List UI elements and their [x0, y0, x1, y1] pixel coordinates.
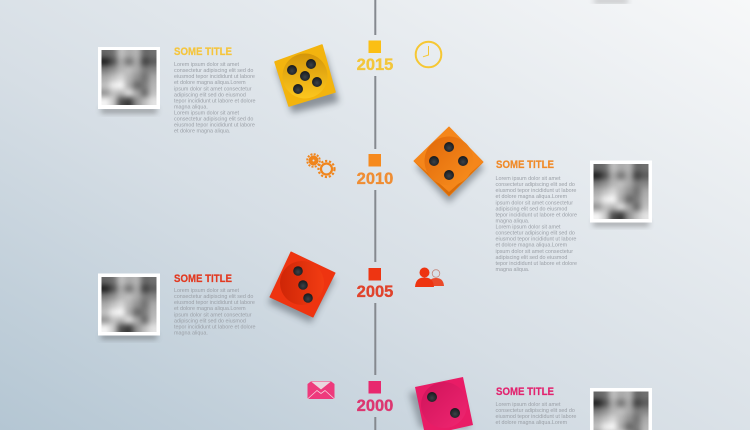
text block 2000: consectetur adipiscing elit sed do — [496, 408, 575, 414]
text block 2000 — [496, 402, 576, 426]
die: red three — [268, 252, 335, 323]
photo 2015 — [96, 44, 162, 113]
text block 2010: ipsum dolor sit amet consectetur — [496, 200, 573, 206]
text block 2010: consectetur adipiscing elit sed do — [496, 182, 575, 188]
text block 2010: ipsum dolor sit amet consectetur — [496, 249, 573, 255]
text block 2010: et dolore magna aliqua.Lorem — [496, 242, 568, 248]
die: pink two — [409, 377, 473, 430]
text block 2005: tepor incididunt ut labore et dolore — [174, 324, 256, 330]
text block 2010: eiusmod tepor incididunt ut labore — [496, 188, 576, 194]
text block 2005: Lorem ipsum dolor sit amet — [174, 288, 240, 294]
milestone 2000 — [357, 381, 393, 415]
text block 2015: consectetur adipiscing elit sed do — [174, 116, 253, 122]
text block 2010: et dolore magna aliqua.Lorem — [496, 194, 568, 200]
text block 2010: tepor incididunt ut labore et dolore — [496, 261, 577, 267]
photo 2010 — [588, 158, 654, 226]
icon: people — [415, 268, 444, 287]
milestone 2015 — [357, 40, 393, 74]
text block 2005: magna aliqua. — [174, 330, 208, 336]
text block 2010: tepor incididunt ut labore et dolore — [496, 212, 577, 218]
text block 2015: eiusmod tepor incididunt ut labore — [174, 122, 255, 128]
milestone 2005 — [357, 268, 393, 301]
text block 2010: adipiscing elit sed do eiusmod — [496, 206, 567, 212]
text block 2010: Lorem ipsum dolor sit amet — [496, 224, 561, 230]
timeline axis — [374, 0, 376, 430]
icon: gears — [307, 154, 334, 177]
text block 2015: eiusmod tepor incididunt ut labore — [174, 74, 255, 80]
year 2005: 2005 — [357, 283, 393, 301]
title 2010: SOME TITLE — [496, 159, 554, 171]
text block 2010: consectetur adipiscing elit sed do — [496, 230, 575, 236]
title 2015: SOME TITLE — [174, 46, 232, 58]
marker 2000 — [368, 381, 381, 394]
text block 2005: et dolore magna aliqua.Lorem — [174, 306, 246, 312]
text block 2000: eiusmod tepor incididunt ut labore — [496, 414, 576, 420]
milestone 2010 — [357, 154, 393, 188]
text block 2015: tepor incididunt ut labore et dolore — [174, 98, 256, 104]
text block 2010: magna aliqua. — [496, 267, 529, 273]
year 2010: 2010 — [357, 170, 393, 188]
text block 2005: adipiscing elit sed do eiusmod — [174, 318, 246, 324]
marker 2005 — [368, 268, 381, 280]
text block 2005 — [174, 288, 256, 336]
text block 2015 — [174, 62, 256, 134]
text block 2015: consectetur adipiscing elit sed do — [174, 68, 253, 74]
text block 2005: consectetur adipiscing elit sed do — [174, 294, 253, 300]
title 2005: SOME TITLE — [174, 273, 232, 285]
text block 2015: ipsum dolor sit amet consectetur — [174, 86, 252, 92]
text block 2010: adipiscing elit sed do eiusmod — [496, 255, 567, 261]
icon: clock — [416, 42, 441, 67]
text block 2000: Lorem ipsum dolor sit amet — [496, 402, 561, 408]
photo 2000 — [588, 386, 654, 430]
text block 2005: ipsum dolor sit amet consectetur — [174, 312, 252, 318]
title 2000: SOME TITLE — [496, 386, 554, 398]
text block 2015: et dolore magna aliqua.Lorem — [174, 80, 246, 86]
text block 2010: Lorem ipsum dolor sit amet — [496, 176, 561, 182]
text block 2000: et dolore magna aliqua.Lorem — [496, 420, 568, 426]
shadow of off-canvas photo at top — [594, 0, 628, 2]
photo 2005 — [96, 271, 162, 339]
year 2015: 2015 — [357, 56, 393, 74]
text block 2015: adipiscing elit sed do eiusmod — [174, 92, 246, 98]
die: yellow five — [275, 45, 339, 113]
text block 2015: Lorem ipsum dolor sit amet — [174, 110, 240, 116]
marker 2015 — [368, 40, 381, 53]
year 2000: 2000 — [357, 397, 393, 415]
text block 2010: magna aliqua. — [496, 218, 529, 224]
text block 2015: magna aliqua. — [174, 104, 208, 110]
icon: envelope — [308, 381, 334, 399]
text block 2015: Lorem ipsum dolor sit amet — [174, 62, 240, 68]
text block 2010 — [496, 176, 577, 273]
die: orange four — [414, 127, 484, 203]
marker 2010 — [368, 154, 381, 166]
text block 2005: eiusmod tepor incididunt ut labore — [174, 300, 255, 306]
text block 2015: et dolore magna aliqua. — [174, 128, 230, 134]
text block 2010: eiusmod tepor incididunt ut labore — [496, 236, 576, 242]
